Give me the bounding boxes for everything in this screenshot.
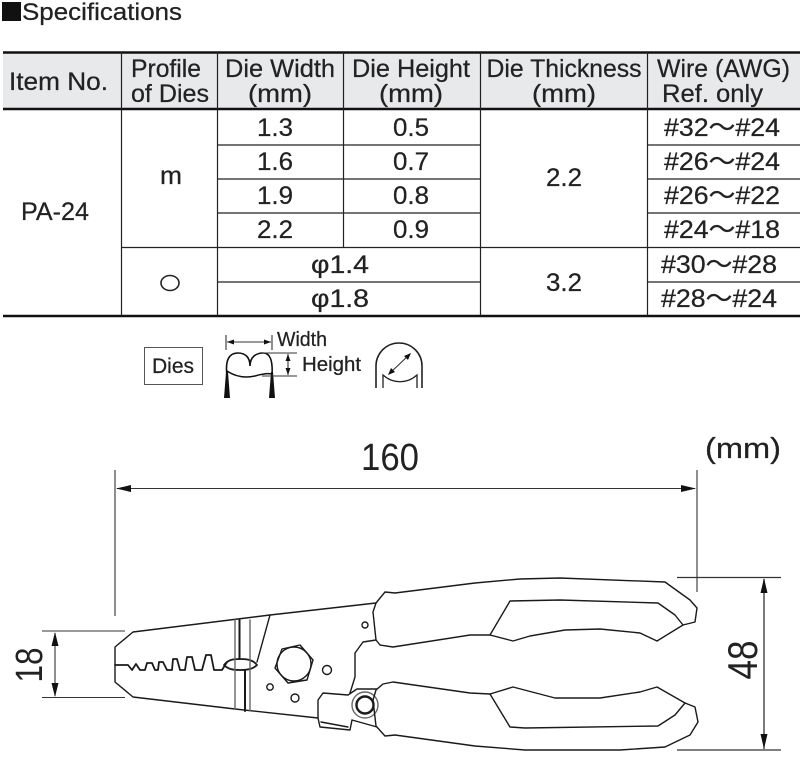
rivet holes xyxy=(267,622,368,702)
table body values: m xyxy=(160,162,182,190)
specifications table xyxy=(3,52,800,316)
table header row xyxy=(3,53,800,109)
dimension: length 160 xyxy=(115,437,697,616)
table body values xyxy=(21,114,780,313)
stripping teeth xyxy=(115,655,227,670)
round-profile die icon with diameter arrow xyxy=(376,343,422,388)
upper handle grip xyxy=(490,600,683,635)
table body values: #24～#18 xyxy=(664,216,780,244)
lock latch xyxy=(318,640,377,730)
lower handle xyxy=(373,682,698,750)
table body values: 0.8 xyxy=(393,182,429,210)
table header row: (mm) xyxy=(379,80,443,108)
m-profile die icon with width and height: Width xyxy=(277,329,327,351)
table body values: 1.9 xyxy=(257,182,293,210)
dies legend xyxy=(144,329,422,398)
lower handle grip xyxy=(490,694,685,728)
table header row: Ref. only xyxy=(662,80,763,108)
m-profile die icon with width and height: Height xyxy=(302,354,361,376)
table body values: 1.3 xyxy=(257,114,293,142)
dimension: handle width 48 xyxy=(677,578,781,750)
table body values: 2.2 xyxy=(546,164,582,192)
cutter oval xyxy=(224,659,257,670)
table body values: φ1.4 xyxy=(311,251,369,279)
table body values: #26～#24 xyxy=(664,148,780,176)
shear slot lines xyxy=(235,615,270,711)
table body values: #30～#28 xyxy=(661,251,777,279)
dimension: jaw width 18: 18 xyxy=(9,648,51,682)
table body values: φ1.8 xyxy=(311,285,369,313)
hex pivot nut xyxy=(275,645,313,683)
dimension: jaw width 18 xyxy=(9,631,125,698)
table header row: (mm) xyxy=(248,80,312,108)
table header row: Die Thickness xyxy=(486,55,642,83)
dimension: handle width 48: 48 xyxy=(719,640,766,680)
table body values: 2.2 xyxy=(257,216,293,244)
table header row: of Dies xyxy=(131,80,209,108)
table body values: 0.9 xyxy=(393,216,429,244)
table body values: 0.5 xyxy=(393,114,429,142)
table header row: Item No. xyxy=(9,68,108,96)
upper handle xyxy=(373,578,697,647)
table body values: PA-24 xyxy=(21,198,89,226)
table body values: #26～#22 xyxy=(664,182,780,210)
m-profile die icon with width and height xyxy=(224,329,361,398)
pliers drawing xyxy=(115,578,698,750)
table body values: 3.2 xyxy=(546,269,582,297)
table header row: (mm) xyxy=(532,80,596,108)
table body values: #28～#24 xyxy=(661,285,777,313)
table body values: #32～#24 xyxy=(664,114,780,142)
table grid lines xyxy=(3,52,800,316)
table header row: Profile xyxy=(131,55,201,83)
pivot ring xyxy=(352,692,378,718)
dies label box xyxy=(144,348,202,384)
dies label box: Dies xyxy=(152,355,194,378)
pliers head outline xyxy=(115,603,376,718)
unit label mm: (mm) xyxy=(705,433,781,465)
table body values: 1.6 xyxy=(257,148,293,176)
table body values: 0.7 xyxy=(393,148,429,176)
dimension: length 160: 160 xyxy=(361,437,419,479)
table header row: Die Height xyxy=(352,55,470,83)
table header row: Wire (AWG) xyxy=(657,55,790,83)
table header row: Die Width xyxy=(225,55,335,83)
